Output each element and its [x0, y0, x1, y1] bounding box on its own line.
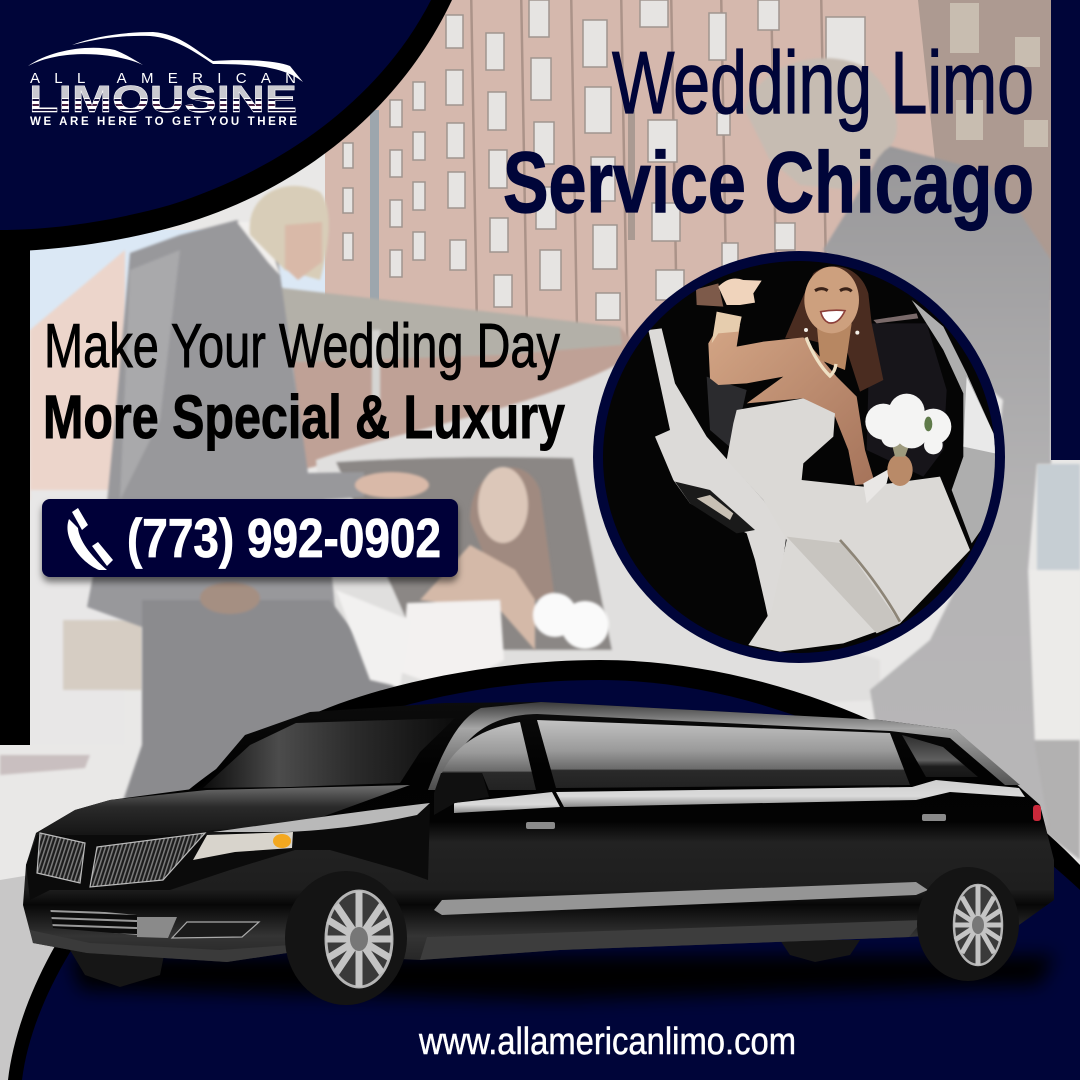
- logo top text: ALL AMERICAN: [30, 70, 296, 87]
- face: [804, 267, 859, 333]
- hair: [785, 266, 883, 392]
- far rear wheel: [780, 940, 860, 962]
- bouquet hand: [887, 454, 913, 486]
- bride hand: [718, 278, 762, 305]
- smile: [821, 310, 845, 323]
- white limo behind bride: [0, 363, 1080, 860]
- phone number: (773) 992-0902: [127, 507, 441, 569]
- bracelet: [712, 312, 742, 343]
- bouquet: [865, 394, 951, 454]
- necklace: [806, 337, 836, 376]
- lower grille: [50, 907, 137, 935]
- fender panel: [26, 805, 430, 900]
- rear window: [902, 735, 978, 777]
- windows: [343, 0, 865, 320]
- bouquet stem: [892, 444, 908, 456]
- groom face: [285, 222, 322, 280]
- logo hood swoosh: [28, 48, 143, 66]
- lamp post: [370, 110, 379, 340]
- sill: [420, 920, 923, 960]
- neck: [817, 323, 852, 370]
- rear wheel: [917, 867, 1019, 981]
- subheading line 2: More Special & Luxury: [43, 383, 565, 451]
- headlight amber: [273, 834, 291, 848]
- dress folds: [840, 540, 900, 622]
- right grille: [90, 833, 205, 887]
- belt chrome: [556, 780, 1025, 807]
- left black bar: [0, 225, 30, 745]
- hood: [36, 785, 410, 848]
- dress: [727, 398, 970, 652]
- circular photo: bride leaving limo: [590, 250, 1010, 670]
- top-left corner shape: [0, 0, 452, 252]
- sky: [30, 230, 330, 330]
- earrings: [804, 328, 808, 332]
- groom head: [250, 186, 329, 280]
- roof chrome band: [428, 702, 1020, 790]
- logo tagline: WE ARE HERE TO GET YOU THERE: [30, 116, 297, 128]
- brick wing and street building: [30, 250, 650, 500]
- groom silhouette left: [87, 186, 429, 810]
- limo interior: [707, 377, 747, 450]
- building facade: [325, 0, 1080, 340]
- rear door handle: [922, 814, 946, 821]
- fog lamp: [172, 922, 259, 938]
- navy curve: [0, 0, 431, 230]
- car ground shadow: [70, 955, 1055, 1000]
- phone button: [42, 499, 458, 577]
- front belt chrome: [454, 792, 560, 813]
- left grille: [37, 833, 85, 883]
- icon: phone handset: [67, 508, 113, 570]
- bride in background: [336, 467, 609, 690]
- lower side chrome: [434, 882, 928, 915]
- title: [503, 33, 1034, 231]
- bumper lip: [30, 930, 290, 962]
- headlight: [193, 832, 293, 860]
- eyes: [815, 289, 852, 291]
- logo: [28, 32, 303, 128]
- door handle: [526, 822, 555, 829]
- windshield: [203, 718, 455, 788]
- hand behind back: [200, 582, 260, 614]
- far front wheel: [70, 950, 165, 987]
- person silhouette right: [745, 58, 1051, 860]
- website url: www.allamericanlimo.com: [418, 1021, 796, 1063]
- arm and chest: [708, 325, 875, 485]
- road: [0, 870, 120, 1080]
- door left white: [648, 328, 786, 616]
- car body: [23, 702, 1054, 962]
- logo roof swoosh: [72, 32, 303, 82]
- bouquet leaf: [924, 417, 932, 431]
- groom sleeve and hand: [696, 283, 723, 307]
- bottom navy shape: [8, 660, 1080, 1080]
- right navy bar: [1051, 0, 1080, 460]
- tower windows: [950, 3, 1048, 147]
- limousine car: [23, 702, 1055, 1005]
- tail light: [1033, 805, 1041, 821]
- long side window: [537, 720, 910, 788]
- lower bumper trim: [137, 917, 177, 938]
- subheading line 1: Make Your Wedding Day: [44, 312, 560, 381]
- navy arc: [22, 680, 1080, 1080]
- second groom head: [745, 58, 897, 190]
- fender chrome highlight: [213, 803, 430, 832]
- side mirror: [434, 773, 489, 815]
- door frame right: [912, 300, 995, 543]
- subheading: [43, 312, 565, 451]
- logo wordmark: LIMOUSINE: [29, 79, 297, 121]
- black arc: [8, 660, 1080, 1080]
- front door window: [441, 722, 536, 790]
- front wheel: [285, 871, 407, 1005]
- black curve: [0, 0, 452, 252]
- clasped hands: [355, 472, 429, 498]
- groom collar: [237, 222, 280, 275]
